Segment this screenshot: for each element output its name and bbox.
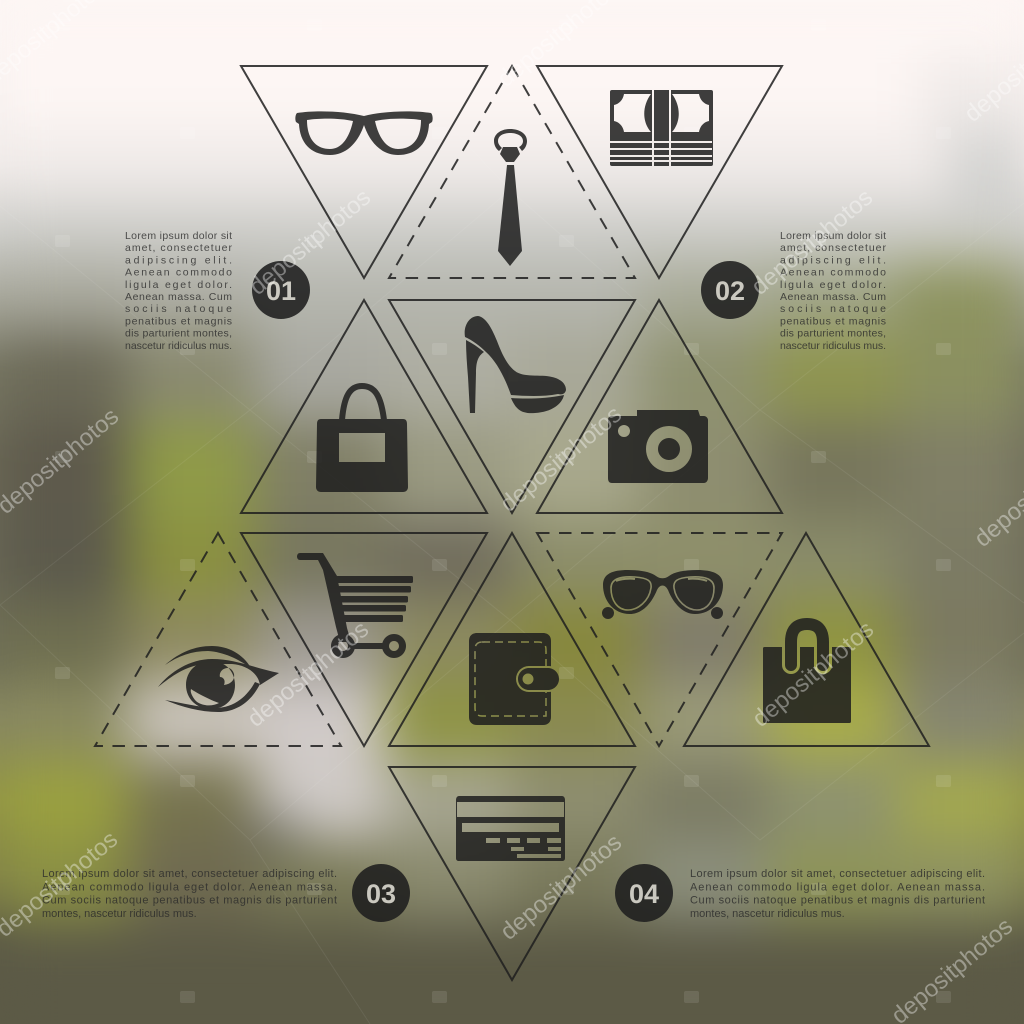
text block 03: Lorem ipsum dolor sit amet, consectetuer adipiscing elit.	[42, 868, 337, 880]
text block 02: amet, consectetuer	[780, 242, 886, 254]
stock watermarks: depositphotos	[747, 616, 879, 733]
triangle: handbag	[241, 300, 487, 513]
text block 01: sociis natoque	[125, 303, 232, 315]
dashed triangle: eye	[95, 533, 341, 746]
badge 02: 02	[715, 276, 745, 306]
text block 01: ligula eget dolor.	[125, 279, 232, 291]
text block 04: Aenean commodo ligula eget dolor. Aenean massa.	[690, 881, 985, 893]
text block 01: dis parturient montes,	[125, 328, 232, 340]
text block 03: Aenean commodo ligula eget dolor. Aenean massa.	[42, 881, 337, 893]
text block 01	[125, 230, 232, 352]
icon: glasses	[295, 111, 433, 155]
text block 01: penatibus et magnis	[125, 315, 232, 327]
text block 02: penatibus et magnis	[780, 315, 886, 327]
text block 02: adipiscing elit.	[780, 254, 886, 266]
text block 02: Aenean massa. Cum	[780, 291, 886, 303]
triangle: camera	[537, 300, 782, 513]
badge 01: 01	[266, 276, 296, 306]
text block 01: Aenean massa. Cum	[125, 291, 232, 303]
text block 01: adipiscing elit.	[125, 254, 232, 266]
stock watermarks: depositphotos	[242, 616, 374, 733]
triangle: wallet	[389, 533, 635, 746]
icon: necktie	[494, 129, 527, 266]
icon: shopping bag	[763, 624, 851, 723]
text block 01: Lorem ipsum dolor sit	[125, 230, 232, 242]
icon: handbag	[316, 386, 408, 492]
text block 04: Lorem ipsum dolor sit amet, consectetuer adipiscing elit.	[690, 868, 985, 880]
text block 02: ligula eget dolor.	[780, 279, 886, 291]
icon: credit card	[456, 796, 565, 861]
stock watermarks: depositphotos	[495, 829, 627, 946]
icon: eye	[158, 646, 279, 712]
stock watermarks: depositphotos	[244, 184, 376, 301]
text block 03	[42, 868, 337, 920]
icon: banknote stack	[610, 90, 713, 166]
icon: camera	[608, 410, 708, 483]
badge 03	[352, 864, 410, 922]
triangle: high heel	[389, 300, 635, 513]
triangle: credit card	[389, 767, 635, 980]
text block 02: Aenean commodo	[780, 267, 886, 279]
badge 04	[615, 864, 673, 922]
text block 04: Cum sociis natoque penatibus et magnis dis parturient	[690, 895, 985, 907]
text block 02	[780, 230, 886, 352]
icon: high heel shoe	[465, 316, 566, 413]
triangle: money	[537, 66, 782, 278]
dashed triangle: sunglasses	[537, 533, 782, 746]
text block 01: amet, consectetuer	[125, 242, 232, 254]
icon: sunglasses	[602, 570, 723, 619]
dashed triangle: tie	[389, 66, 635, 278]
icon: shopping cart	[297, 553, 413, 658]
triangle: shopping bag	[684, 533, 929, 746]
text block 02: nascetur ridiculus mus.	[780, 340, 886, 352]
stock watermarks: depositphotos	[495, 401, 627, 518]
text block 02: sociis natoque	[780, 303, 886, 315]
badge 02	[701, 261, 759, 319]
text block 04	[690, 868, 985, 920]
stock watermarks: depositphotos	[746, 184, 878, 301]
text block 03: montes, nascetur ridiculus mus.	[42, 908, 197, 920]
triangle: shopping cart	[241, 533, 487, 746]
badge 04: 04	[629, 879, 659, 909]
text block 02: dis parturient montes,	[780, 328, 886, 340]
text block 04: montes, nascetur ridiculus mus.	[690, 908, 845, 920]
text block 01: nascetur ridiculus mus.	[125, 340, 232, 352]
triangle: glasses	[241, 66, 487, 278]
badge 01	[252, 261, 310, 319]
badge 03: 03	[366, 879, 396, 909]
text block 03: Cum sociis natoque penatibus et magnis dis parturient	[42, 895, 337, 907]
text block 02: Lorem ipsum dolor sit	[780, 230, 886, 242]
icon: wallet	[469, 633, 559, 725]
text block 01: Aenean commodo	[125, 267, 232, 279]
